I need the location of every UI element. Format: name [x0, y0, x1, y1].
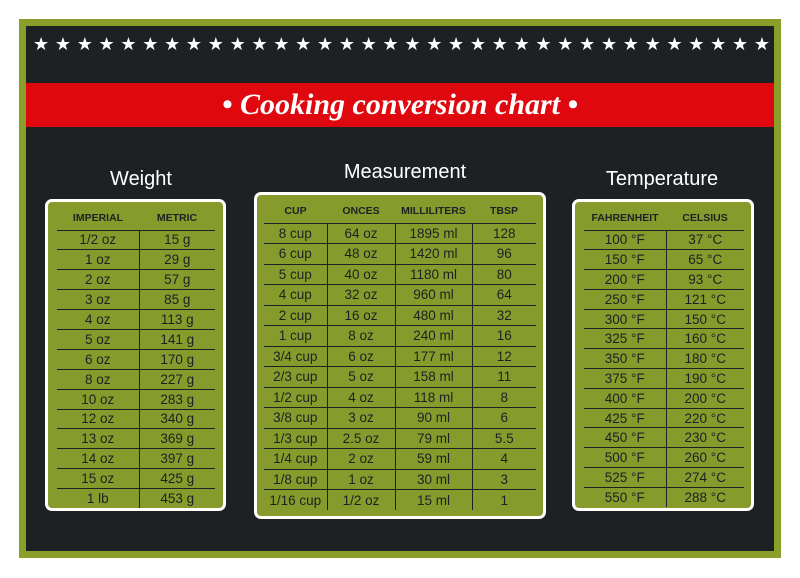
stars row: ★ — [754, 34, 770, 55]
panel: weight: 340 g — [160, 411, 194, 426]
panel: measurement: 2 cup — [279, 308, 312, 323]
panel: measurement: 2 oz — [348, 451, 374, 466]
stars row: ★ — [645, 34, 661, 55]
stars row: ★ — [710, 34, 726, 55]
panel: weight: 170 g — [160, 352, 194, 367]
panel: temperature: 93 °C — [688, 272, 722, 287]
panel: measurement: 1/3 cup — [273, 431, 317, 446]
panel: temperature: 65 °C — [688, 252, 722, 267]
panel: measurement: 1/8 cup — [273, 472, 317, 487]
panel: temperature: 550 °F — [605, 490, 645, 505]
stars row: ★ — [557, 34, 573, 55]
panel: measurement: 4 cup — [279, 287, 312, 302]
panel: measurement: 1 oz — [348, 472, 374, 487]
panel: measurement: 90 ml — [417, 410, 450, 425]
panel: measurement: 48 oz — [344, 246, 378, 261]
stars row: ★ — [688, 34, 704, 55]
stars row: ★ — [273, 34, 289, 55]
panel: measurement: 1/16 cup — [269, 492, 321, 508]
panel: temperature: 325 °F — [605, 331, 645, 346]
panel: temperature: 200 °F — [605, 272, 645, 287]
panel: measurement: 5 oz — [348, 369, 374, 384]
panel: measurement: 128 — [493, 226, 516, 241]
stars row: ★ — [579, 34, 595, 55]
stars row: ★ — [339, 34, 355, 55]
panel: measurement: 80 — [497, 267, 512, 282]
panel: measurement: 4 — [500, 451, 508, 466]
panel: weight: 283 g — [160, 392, 194, 407]
panel: measurement: 1420 ml — [409, 246, 458, 261]
stars row: ★ — [208, 34, 224, 55]
panel: measurement: 240 ml — [413, 328, 454, 343]
panel: temperature: 200 °C — [685, 391, 726, 406]
panel: weight: 369 g — [160, 431, 194, 446]
stars row: ★ — [426, 34, 442, 55]
panel: temperature: 500 °F — [605, 450, 645, 465]
panel: temperature: 274 °C — [685, 470, 726, 485]
panel: measurement: MILLILITERS — [401, 205, 466, 217]
stars row: ★ — [666, 34, 683, 55]
panel: weight: 425 g — [160, 471, 194, 486]
panel: temperature: 121 °C — [685, 292, 726, 307]
panel: temperature: 250 °F — [605, 292, 645, 307]
panel: weight: 4 oz — [85, 312, 111, 327]
stars row: ★ — [33, 34, 49, 55]
panel: measurement: 6 cup — [279, 246, 312, 261]
panel: measurement: 6 oz — [348, 349, 374, 364]
panel: measurement: 118 ml — [414, 390, 453, 405]
panel: measurement: 15 ml — [417, 492, 450, 508]
panel: weight: 29 g — [164, 252, 190, 267]
stars row: ★ — [186, 34, 202, 55]
panel: measurement: 2/3 cup — [273, 369, 317, 384]
panel: measurement: 16 oz — [344, 308, 378, 323]
panel: measurement: ONCES — [342, 205, 380, 217]
panel: weight: 14 oz — [81, 451, 114, 466]
panel: measurement: 1/2 cup — [273, 390, 317, 405]
stars row: ★ — [99, 34, 115, 55]
panel: temperature: 260 °C — [685, 450, 726, 465]
panel: measurement: 1 cup — [279, 328, 312, 343]
panel: measurement: 5 cup — [279, 267, 312, 282]
panel: temperature: 375 °F — [605, 371, 645, 386]
panel: temperature: CELSIUS — [682, 212, 728, 224]
panel: temperature: 220 °C — [685, 411, 726, 426]
stars row: ★ — [492, 34, 508, 55]
panel: measurement: 8 — [500, 390, 508, 405]
panel: weight: 6 oz — [85, 352, 111, 367]
panel: weight: 13 oz — [81, 431, 114, 446]
panel: weight: 12 oz — [81, 411, 114, 426]
panel: measurement: 64 oz — [344, 226, 378, 241]
heading: measurement: Measurement — [344, 161, 466, 183]
panel: weight: IMPERIAL — [73, 212, 123, 224]
stars row: ★ — [164, 34, 180, 55]
panel: temperature: 160 °C — [685, 331, 726, 346]
panel: measurement: 1180 ml — [410, 267, 457, 282]
panel: temperature: 100 °F — [605, 232, 645, 247]
panel: weight: 85 g — [164, 292, 190, 307]
stars row: ★ — [55, 34, 71, 55]
panel: weight: 5 oz — [85, 332, 111, 347]
panel: measurement: 59 ml — [417, 451, 450, 466]
panel: measurement: CUP — [284, 205, 307, 217]
panel: measurement: 960 ml — [413, 287, 454, 302]
panel: measurement: TBSP — [490, 205, 518, 217]
panel: temperature: 190 °C — [685, 371, 726, 386]
panel: measurement: 3 — [500, 472, 508, 487]
stars row: ★ — [317, 34, 333, 55]
panel: measurement: 177 ml — [413, 349, 454, 364]
panel: temperature: 525 °F — [605, 470, 645, 485]
panel: temperature: FAHRENHEIT — [591, 212, 659, 224]
panel: temperature: 150 °F — [605, 252, 645, 267]
panel: weight: 57 g — [164, 272, 190, 287]
panel: measurement: 8 oz — [348, 328, 374, 343]
panel: weight — [45, 199, 226, 511]
panel: weight: 8 oz — [85, 372, 111, 387]
panel: measurement: 2.5 oz — [343, 431, 379, 446]
panel: temperature: 37 °C — [688, 232, 722, 247]
panel: measurement: 1 — [500, 492, 508, 508]
panel: weight: 113 g — [161, 312, 194, 327]
panel: weight: METRIC — [157, 212, 197, 224]
stars row: ★ — [120, 34, 137, 55]
stars row: ★ — [732, 34, 748, 55]
panel: weight: 453 g — [160, 491, 194, 506]
stars row: ★ — [295, 34, 311, 55]
panel: measurement: 3/4 cup — [273, 349, 317, 364]
panel: measurement: 8 cup — [279, 226, 312, 241]
panel: weight: 1 oz — [85, 252, 111, 267]
panel: temperature: 288 °C — [685, 490, 726, 505]
panel: measurement: 5.5 — [495, 431, 514, 446]
panel: measurement: 480 ml — [413, 308, 454, 323]
panel: measurement: 4 oz — [348, 390, 374, 405]
panel: measurement: 32 — [497, 308, 512, 323]
panel: weight: 15 oz — [81, 471, 114, 486]
panel: weight: 2 oz — [85, 272, 111, 287]
panel: measurement: 40 oz — [344, 267, 378, 282]
panel: measurement: 32 oz — [344, 287, 378, 302]
panel: measurement: 6 — [500, 410, 508, 425]
stars row: ★ — [601, 34, 617, 55]
panel: measurement — [254, 192, 546, 519]
panel: temperature: 350 °F — [605, 351, 645, 366]
panel: weight: 227 g — [160, 372, 194, 387]
panel: temperature: 425 °F — [605, 411, 645, 426]
panel: weight: 1/2 oz — [79, 232, 116, 247]
panel: weight: 1 lb — [87, 491, 109, 506]
panel: temperature — [572, 199, 754, 511]
stars row: ★ — [77, 34, 93, 55]
panel: measurement: 158 ml — [413, 369, 454, 384]
panel: temperature: 150 °C — [685, 312, 726, 327]
stars row: ★ — [251, 34, 268, 55]
panel: weight: 141 g — [160, 332, 194, 347]
stars row: ★ — [142, 34, 158, 55]
panel: temperature: 400 °F — [605, 391, 645, 406]
panel: measurement: 79 ml — [417, 431, 450, 446]
stars row: ★ — [470, 34, 486, 55]
panel: measurement: 12 — [497, 349, 512, 364]
panel: measurement: 3/8 cup — [273, 410, 317, 425]
panel: measurement: 1/2 oz — [343, 492, 379, 508]
panel: measurement: 96 — [497, 246, 512, 261]
stars row: ★ — [623, 34, 639, 55]
panel: measurement: 30 ml — [417, 472, 450, 487]
stars row — [33, 34, 770, 55]
title banner: • Cooking conversion chart • — [222, 88, 578, 121]
stars row: ★ — [448, 34, 464, 55]
stars row: ★ — [382, 34, 399, 55]
panel: temperature: 180 °C — [685, 351, 726, 366]
heading: weight: Weight — [110, 168, 172, 190]
panel: measurement: 1895 ml — [409, 226, 458, 241]
heading: temperature: Temperature — [606, 168, 718, 190]
stars row: ★ — [230, 34, 246, 55]
panel: temperature: 230 °C — [685, 430, 726, 445]
title banner — [26, 83, 774, 127]
panel: weight: 3 oz — [85, 292, 111, 307]
stars row: ★ — [535, 34, 552, 55]
panel: temperature: 300 °F — [605, 312, 645, 327]
panel: measurement: 16 — [497, 328, 512, 343]
panel: measurement: 1/4 cup — [273, 451, 317, 466]
panel: weight: 397 g — [160, 451, 194, 466]
panel: measurement: 64 — [497, 287, 512, 302]
panel: measurement: 11 — [497, 369, 511, 384]
stars row: ★ — [361, 34, 377, 55]
stars row: ★ — [404, 34, 420, 55]
panel: temperature: 450 °F — [605, 430, 645, 445]
panel: weight: 10 oz — [81, 392, 114, 407]
panel: measurement: 3 oz — [348, 410, 374, 425]
panel: weight: 15 g — [164, 232, 190, 247]
stars row: ★ — [514, 34, 530, 55]
